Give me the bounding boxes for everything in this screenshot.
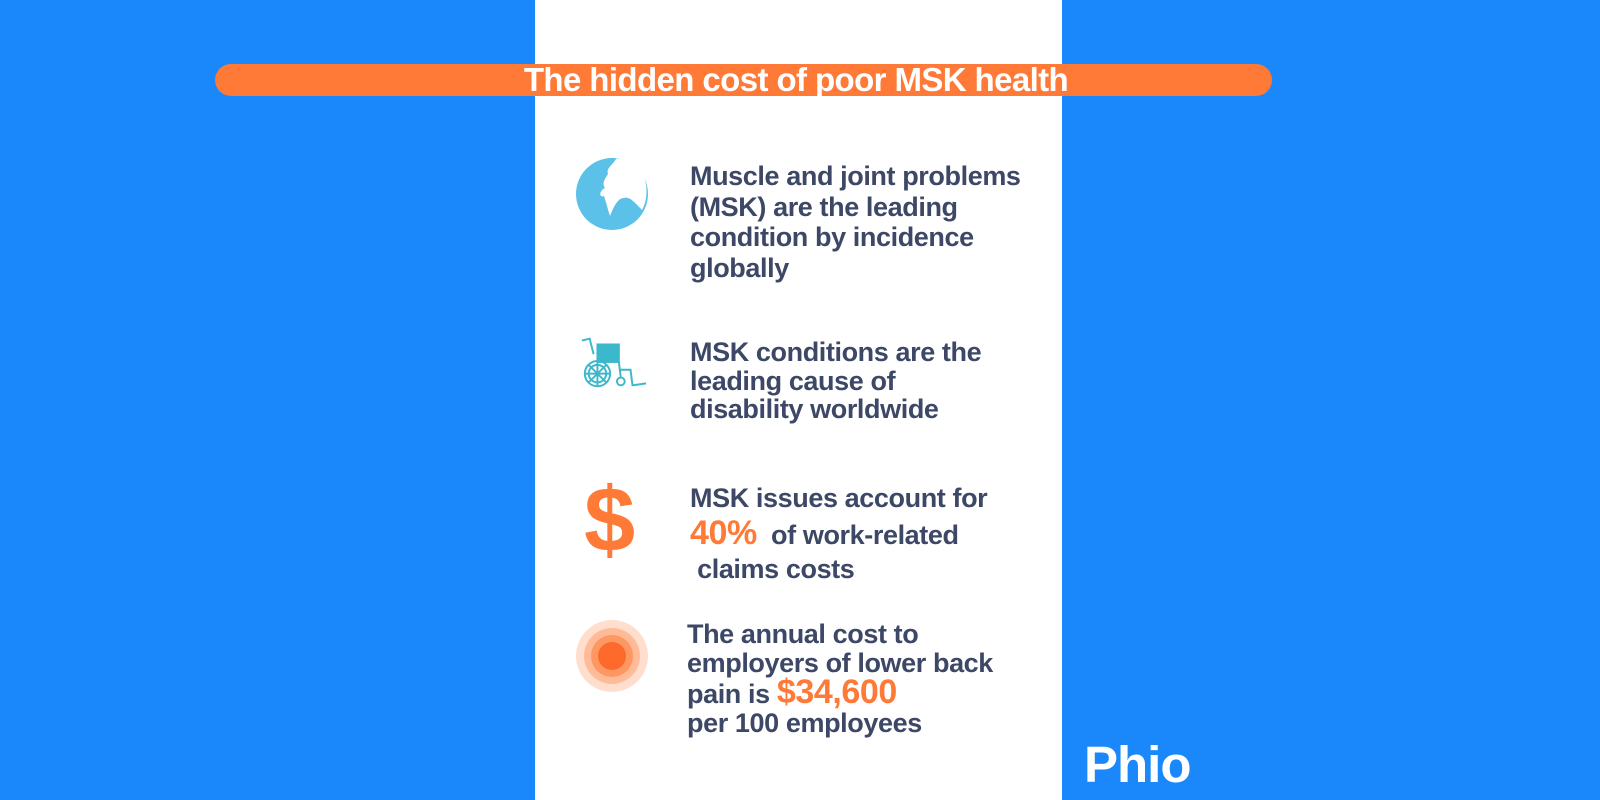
title: The hidden cost of poor MSK health [524, 61, 1068, 98]
text: back pain cost: The annual cost to [687, 619, 918, 649]
icon: pain target [576, 620, 648, 692]
text: disability: leading cause of [690, 366, 895, 396]
text: disability: disability worldwide [690, 394, 939, 424]
text: disability: MSK conditions are the [690, 337, 981, 367]
text: incidence: condition by incidence [690, 222, 974, 252]
text: incidence: Muscle and joint problems [690, 161, 1021, 191]
logo: Phio [1084, 736, 1190, 793]
text: claims costs: claims costs [697, 554, 854, 584]
text: incidence: globally [690, 253, 789, 283]
text: back pain cost: pain is $34,600 [687, 673, 897, 711]
text: claims costs: MSK issues account for [690, 483, 987, 513]
icon: wheelchair [582, 338, 646, 388]
text: incidence [690, 161, 1021, 283]
text: back pain cost [687, 619, 994, 738]
title bar [215, 64, 1272, 96]
text: claims costs: 40% of work-related [690, 514, 959, 552]
text: claims costs [690, 483, 988, 584]
text: back pain cost: per 100 employees [687, 708, 922, 738]
text: back pain cost: employers of lower back [687, 648, 993, 678]
icon: globe [576, 158, 648, 230]
text: disability [690, 337, 981, 424]
icon: dollar: $ [584, 469, 635, 571]
text: incidence: (MSK) are the leading [690, 192, 958, 222]
